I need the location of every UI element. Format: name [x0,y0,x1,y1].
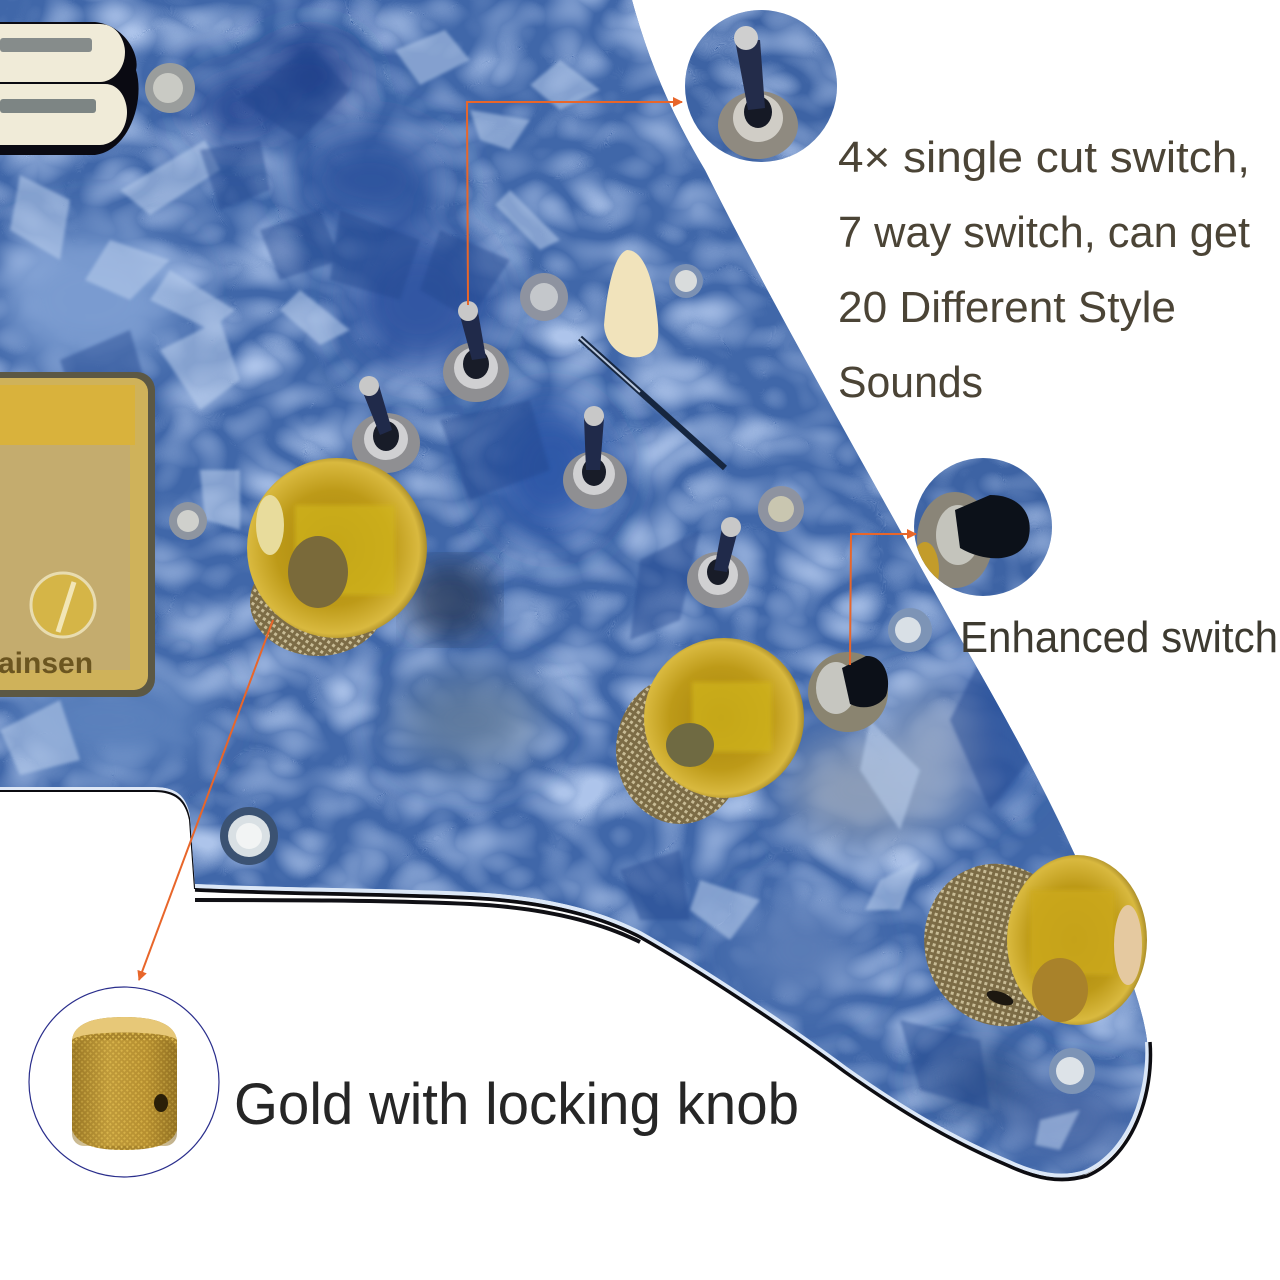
inset: enhanced switch close-up [910,455,1055,600]
knob 2 [616,638,804,824]
text: switch description: Sounds [838,358,983,407]
gold humbucker pickup [0,372,155,697]
text: switch description: 20 Different Style [838,283,1176,332]
shaded pearl regions [0,40,1130,1155]
gold humbucker pickup: ainsen [0,647,93,680]
screws and mounting holes [145,63,1095,1094]
text: switch description [838,133,1250,407]
arrow: enhanced switch to inset [850,534,916,665]
inset: gold locking knob [29,987,219,1177]
text: gold knob: Gold with locking knob [234,1072,799,1137]
text: switch description: 4× single cut switch, [838,133,1250,182]
pearl facets [0,30,1080,1150]
text: switch description: 7 way switch, can get [838,208,1250,257]
knob 1 [247,458,495,656]
toggle switches [443,301,509,402]
knob 3 [901,842,1147,1048]
arrow: toggle switch to inset [467,102,682,305]
arrow: knob to locking knob inset [139,620,273,980]
top humbucker pickup [0,22,139,155]
enhanced push switch [808,652,888,732]
inset: toggle switch close-up [685,10,837,162]
7 way switch slot and cream tip [580,250,725,468]
lower edge binding [195,886,1147,1176]
